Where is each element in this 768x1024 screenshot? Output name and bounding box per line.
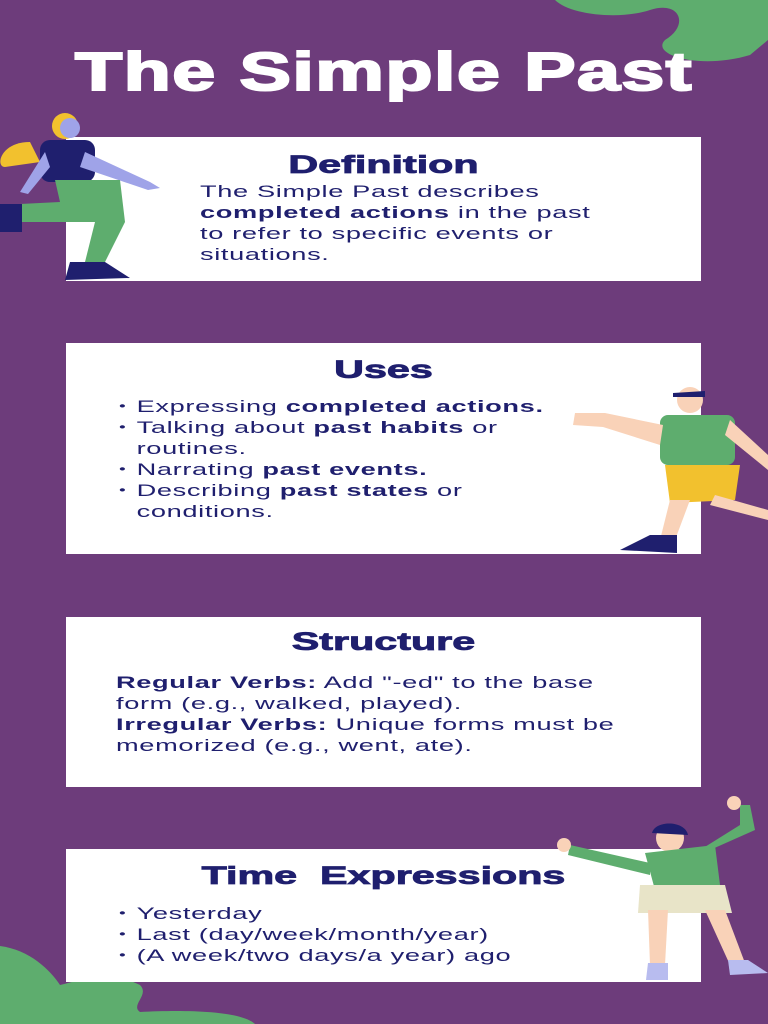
list: uses: conditions. [137,502,274,521]
panel: definition [66,137,701,281]
heading: structure: Structure [292,628,475,656]
panel: time expressions [66,849,701,982]
text: structure: memorized (e.g., went, ate). [116,736,473,755]
list: time expressions: • [119,906,126,920]
panel: structure [66,617,701,787]
list: uses: • [119,420,126,434]
blob: top right [555,0,768,62]
heading: uses: Uses [334,356,433,384]
text: structure [116,673,614,755]
text: definition: to refer to specific events or [200,224,553,243]
list: uses: • [119,462,126,476]
heading: time expressions: Time Expressions [202,862,565,890]
text: definition: completed actions in the past [200,203,590,222]
blob: bottom left [0,946,255,1024]
figure: cheering person [557,796,768,980]
text: structure: Regular Verbs: Add "-ed" to the base [116,673,594,692]
list: uses [119,397,544,521]
list: time expressions [119,904,511,965]
text: structure: Irregular Verbs: Unique forms must be [116,715,614,734]
list: time expressions: Last (day/week/month/year) [137,925,489,944]
list: uses: Narrating past events. [137,460,427,479]
text: structure: form (e.g., walked, played). [116,694,462,713]
list: time expressions: • [119,948,126,962]
list: uses: • [119,483,126,497]
list: uses: routines. [137,439,247,458]
panel: uses [66,343,701,554]
title: The Simple Past [75,42,693,102]
heading: definition: Definition [288,151,479,179]
text: definition [200,182,590,264]
list: uses: Expressing completed actions. [137,397,544,416]
figure: running man [573,387,768,553]
list: time expressions: (A week/two days/a year) ago [137,946,511,965]
text: definition: The Simple Past describes [200,182,540,201]
list: uses: Talking about past habits or [137,418,498,437]
list: uses: • [119,399,126,413]
text: definition: situations. [200,245,330,264]
list: time expressions: Yesterday [137,904,262,923]
list: uses: Describing past states or [137,481,463,500]
list: time expressions: • [119,927,126,941]
figure: walking woman [0,113,160,280]
